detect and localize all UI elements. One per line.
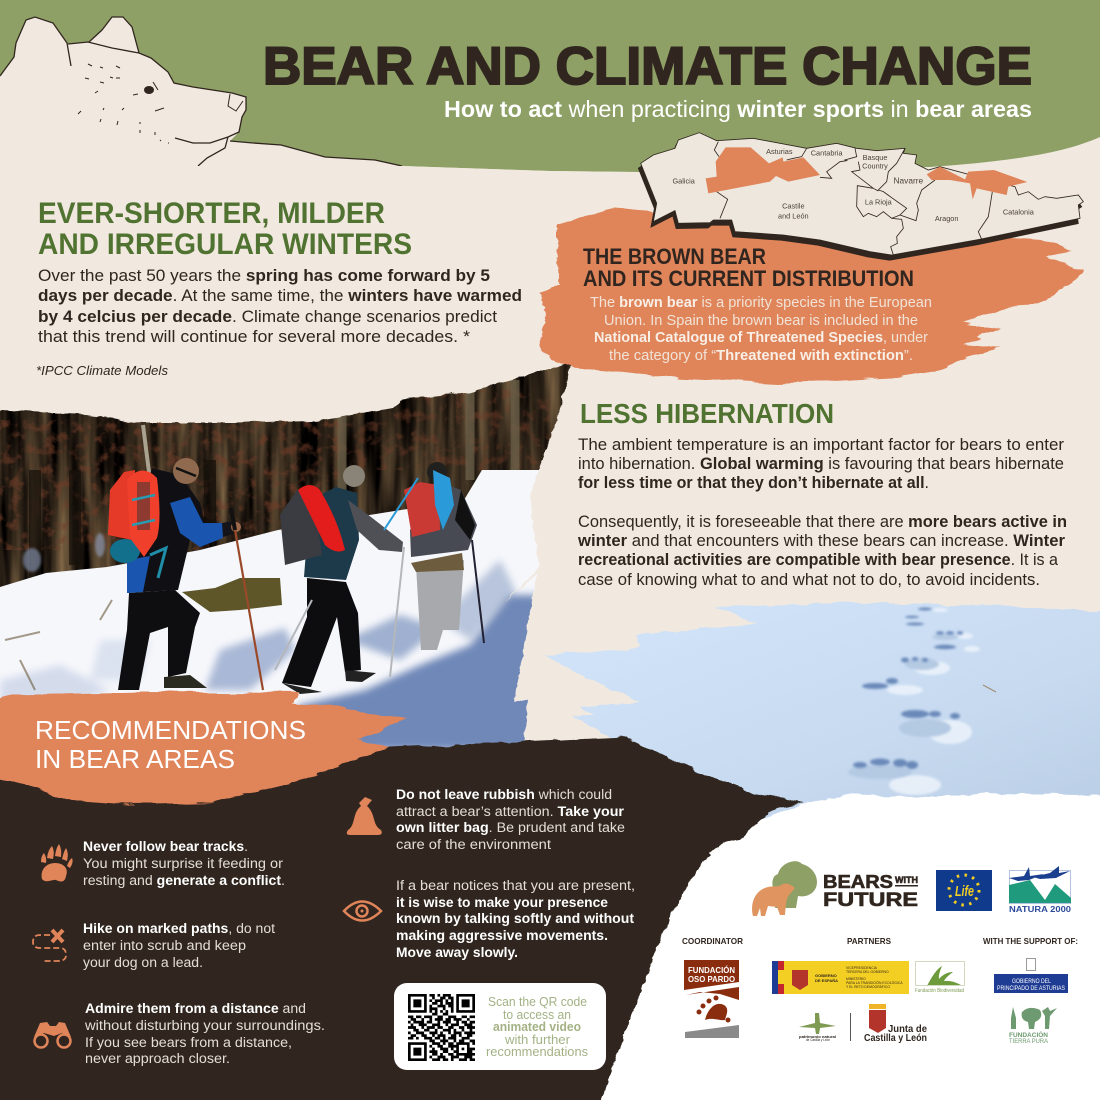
- QR code: [408, 994, 475, 1061]
- recommendation: presence: known by talking softly and without: [396, 911, 635, 926]
- map of northern Spain: Catalonia: [1003, 208, 1035, 217]
- text: brown bear: Union. In Spain the brown bear is included in the: [604, 313, 918, 329]
- recommendation: distance: without disturbing your surroundings.: [84, 1018, 325, 1033]
- QR caption: animated video: [493, 1020, 581, 1034]
- heading: brown bear: THE BROWN BEAR: [583, 244, 766, 269]
- recommendation: marked paths: [83, 921, 275, 970]
- brush panel: brown bear: [540, 210, 1083, 383]
- map of northern Spain: Aragon: [935, 214, 958, 223]
- recommendation: rubbish: care of the environment: [396, 837, 551, 852]
- logo: Junta de Castilla y León: Castilla y León: [864, 1033, 927, 1044]
- recommendation: distance: Admire them from a distance and: [85, 1001, 306, 1016]
- hiker 3: [416, 560, 464, 650]
- QR caption: Scan the QR code: [488, 995, 587, 1009]
- map of northern Spain: La Rioja: [865, 197, 893, 206]
- map of northern Spain: Basque: [863, 153, 887, 162]
- recommendation: presence: [396, 878, 635, 960]
- logo: Fundación Oso Pardo: FUNDACIÓN: [688, 964, 735, 975]
- text: hibernation: into hibernation. Global warming is favouring that bears hibernate: [578, 455, 1064, 473]
- footnote: *IPCC Climate Models: [36, 363, 168, 378]
- logo: Natura 2000: [1009, 866, 1072, 914]
- recommendation: bear tracks: You might surprise it feeding or: [83, 856, 284, 871]
- text: winters: [38, 267, 522, 346]
- logo: Gobierno del Principado de Asturias: GOBIERNO DEL: [1012, 979, 1052, 985]
- label: partners: PARTNERS: [847, 936, 891, 946]
- icon: binoculars: [34, 1022, 71, 1048]
- heading: winters: [38, 197, 412, 261]
- icon: litter bag: [347, 797, 382, 835]
- QR caption: to access an: [503, 1008, 571, 1022]
- heading: winters: EVER-SHORTER, MILDER: [38, 197, 385, 230]
- logo: Gobierno de España: PARA LA TRANSICIÓN ECOLÓGICA: [846, 980, 903, 985]
- subtitle: How to act when practicing winter sports in bear areas: [444, 96, 1032, 122]
- recommendation: rubbish: [396, 787, 625, 852]
- QR caption: with further: [504, 1033, 570, 1047]
- map of northern Spain: Cantabria: [811, 149, 843, 158]
- logo: Gobierno de España: Y EL RETO DEMOGRÁFICO: [846, 985, 890, 989]
- photo: bear tracks in snow: [544, 603, 1100, 820]
- logo: Fundación Biodiversidad: Fundación Biodiversidad: [915, 988, 964, 994]
- logo: Gobierno de España: GOBIERNO: [815, 973, 837, 978]
- logo: Fundación Oso Pardo: [684, 960, 739, 1038]
- logo: Fundación Biodiversidad: [915, 962, 964, 994]
- text: winters: by 4 celcius per decade . Climate change scenarios predict: [38, 308, 497, 326]
- logo: Fundación Tierra Pura: TIERRA PURA: [1009, 1039, 1048, 1045]
- text: brown bear: [590, 295, 932, 364]
- snow: [0, 470, 540, 705]
- logo: Gobierno del Principado de Asturias: PRINCIPADO DE ASTURIAS: [997, 986, 1065, 992]
- heading: recommendations: RECOMMENDATIONS: [35, 715, 306, 745]
- logo: Patrimonio Natural: patrimonio natural: [799, 1035, 836, 1039]
- brush panel: recommendations: [0, 692, 407, 805]
- heading: winters: AND IRREGULAR WINTERS: [38, 228, 412, 261]
- map of northern Spain: [639, 133, 1083, 260]
- logo: Gobierno de España: DE ESPAÑA: [815, 978, 838, 983]
- text: hibernation: for less time or that they don’t hibernate at all.: [578, 474, 929, 492]
- icon: marked path: [33, 930, 66, 961]
- recommendation: rubbish: own litter bag . Be prudent and take: [396, 820, 625, 835]
- recommendation: bear tracks: Never follow bear tracks .: [83, 839, 248, 854]
- recommendation: marked paths: your dog on a lead.: [83, 955, 203, 970]
- recommendation: bear tracks: [83, 839, 285, 888]
- logo: EU Life: [936, 870, 992, 911]
- logo: Junta de Castilla y León: Junta de: [888, 1024, 927, 1035]
- text: brown bear: The brown bear is a priority species in the European: [590, 295, 932, 311]
- logo: Gobierno de España: TERCERA DEL GOBIERNO: [846, 970, 889, 974]
- text: brown bear: the category of “Threatened with extinction ”.: [609, 348, 913, 364]
- logo: Bears with Future: BEARS: [823, 872, 893, 892]
- recommendation: presence: Move away slowly.: [396, 945, 518, 960]
- recommendation: distance: never approach closer.: [85, 1051, 230, 1066]
- logo: Gobierno de España: [772, 961, 909, 994]
- logo: Gobierno de España: VICEPRESIDENCIA: [846, 966, 878, 970]
- map of northern Spain: Country: [862, 162, 888, 171]
- text: hibernation: Consequently, it is foreseeable that there are more bears active in: [578, 513, 1067, 531]
- logo: Junta de Castilla y León: [864, 1004, 927, 1044]
- heading: recommendations: IN BEAR AREAS: [35, 744, 235, 774]
- header band: [0, 0, 1100, 172]
- recommendation: marked paths: Hike on marked paths , do not: [83, 921, 275, 936]
- text: hibernation: case of knowing what to and what not to do, to avoid incidents.: [578, 571, 1040, 589]
- restore upper band over torn edge: [0, 166, 640, 300]
- rock: [182, 578, 282, 612]
- torn paper edge over photo: [0, 300, 640, 750]
- logo: Gobierno del Principado de Asturias: [994, 958, 1068, 993]
- label: support: WITH THE SUPPORT OF:: [983, 936, 1078, 946]
- heading: brown bear: [583, 244, 914, 291]
- recommendation: presence: it is wise to make your presence: [396, 895, 608, 910]
- text: winters: Over the past 50 years the spring has come forward by 5: [38, 267, 490, 285]
- illustration: bear head: [0, 17, 402, 200]
- heading: hibernation: LESS HIBERNATION: [580, 398, 834, 429]
- logo: Bears with Future: WITH: [895, 875, 918, 885]
- hiker 2: [282, 578, 361, 687]
- logo: Bears with Future: [752, 861, 918, 916]
- text: hibernation: recreational activities are compatible with bear presence. It is a: [578, 551, 1059, 569]
- recommendation: marked paths: enter into scrub and keep: [83, 938, 246, 953]
- logo: EU Life: Life: [955, 883, 974, 900]
- text: hibernation: [577, 436, 1067, 589]
- text: winters: days per decade . At the same time, the winters have warmed: [38, 287, 522, 305]
- map of northern Spain: Navarre: [894, 175, 924, 185]
- recommendation: distance: If you see bears from a distance,: [85, 1035, 292, 1050]
- label: coordinator: COORDINATOR: [682, 936, 743, 946]
- recommendation: presence: If a bear notices that you are present,: [396, 878, 635, 893]
- logo: Patrimonio Natural: [799, 1013, 851, 1042]
- logo: Natura 2000: NATURA 2000: [1009, 905, 1072, 914]
- text: brown bear: National Catalogue of Threatened Species, under: [594, 330, 928, 346]
- dark recommendations panel: [0, 737, 804, 1100]
- icon: eye: [344, 902, 381, 920]
- hiker 1: [118, 590, 200, 690]
- recommendation: bear tracks: resting and generate a conflict .: [83, 873, 285, 888]
- QR caption: [486, 995, 588, 1059]
- map of northern Spain: Asturias: [766, 147, 793, 156]
- recommendation: distance: [84, 1001, 325, 1066]
- recommendation: rubbish: attract a bear’s attention. Take your: [396, 804, 625, 819]
- logo: Bears with Future: FUTURE: [823, 890, 918, 911]
- logo: Fundación Oso Pardo: OSO PARDO: [688, 974, 735, 984]
- QR card: [394, 983, 606, 1070]
- map of northern Spain: Galicia: [672, 176, 696, 185]
- white logos panel: [590, 793, 1100, 1100]
- heading: brown bear: AND ITS CURRENT DISTRIBUTION: [583, 266, 914, 291]
- logo: Fundación Tierra Pura: FUNDACIÓN: [1009, 1031, 1048, 1039]
- icon: bear paw: [41, 844, 73, 881]
- photo: snowshoe hikers in forest: [0, 350, 585, 750]
- logo: Patrimonio Natural: de Castilla y León: [806, 1038, 830, 1042]
- map of northern Spain: Castile: [782, 202, 805, 211]
- logo: Fundación Tierra Pura: [1009, 1007, 1057, 1045]
- text: hibernation: winter and that encounters with these bears can increase. Winter: [577, 532, 1066, 550]
- title: BEAR AND CLIMATE CHANGE: [263, 37, 1032, 96]
- text: hibernation: The ambient temperature is an important factor for bears to enter: [578, 436, 1065, 454]
- map of northern Spain: and León: [778, 212, 809, 221]
- heading: recommendations: [35, 715, 306, 774]
- text: winters: that this trend will continue for several more decades. *: [38, 328, 471, 346]
- recommendation: rubbish: Do not leave rubbish which could: [396, 787, 612, 802]
- logo: Gobierno de España: MINISTERIO: [846, 977, 866, 981]
- recommendation: presence: making aggressive movements.: [396, 928, 608, 943]
- QR caption: recommendations: [486, 1045, 588, 1059]
